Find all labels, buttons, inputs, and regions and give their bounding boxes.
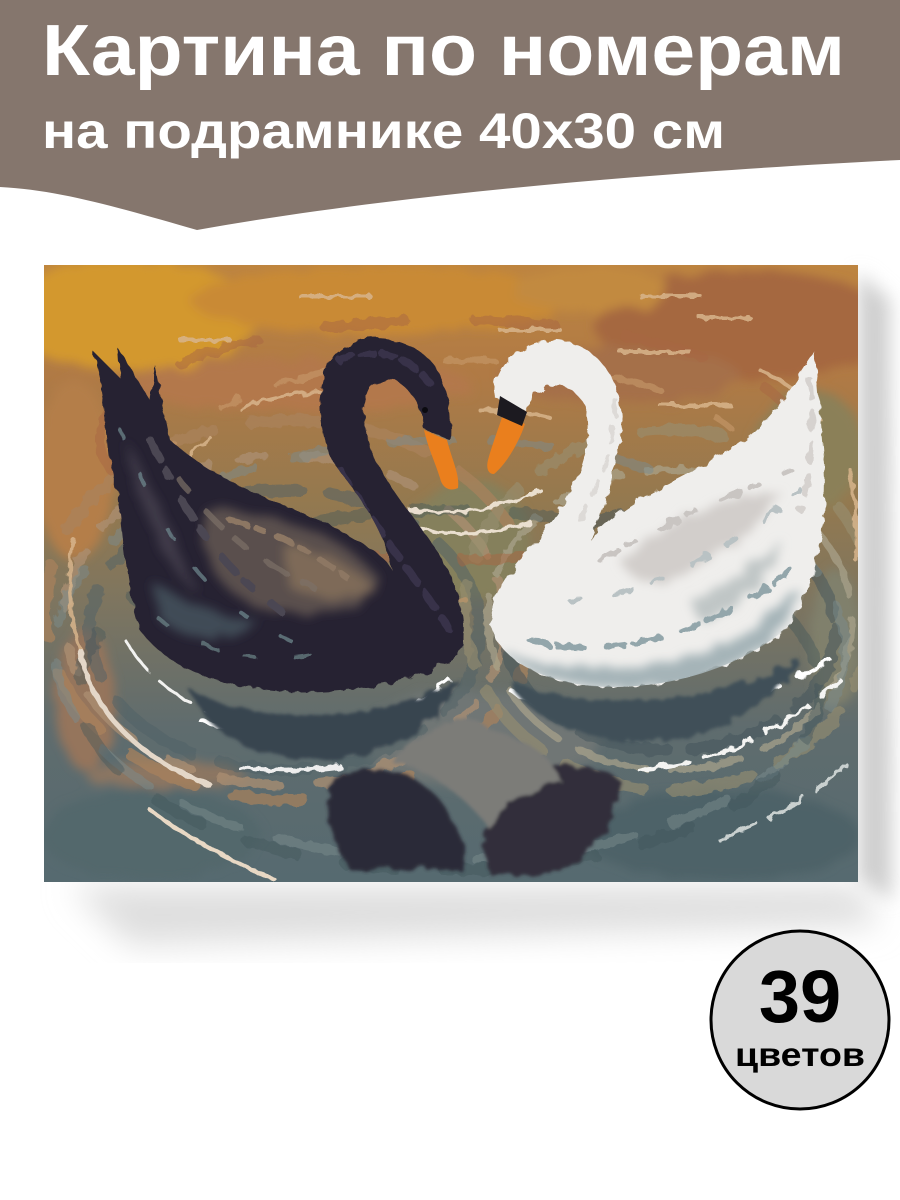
golden and brown water patches xyxy=(44,265,858,876)
canvas drop shadow xyxy=(70,272,892,945)
badge label: цветов xyxy=(735,1036,865,1073)
black swan xyxy=(92,339,463,692)
water background xyxy=(44,265,858,882)
black swan feather texture xyxy=(120,353,450,658)
subtitle: на подрамнике 40х30 см xyxy=(42,103,725,159)
black swan beak xyxy=(424,430,458,490)
badge: 39 colours xyxy=(711,931,889,1109)
white swan beak xyxy=(487,414,525,474)
painting: two swans on a pond xyxy=(0,260,895,882)
white swan xyxy=(487,340,825,689)
black swan body xyxy=(92,339,463,692)
light strokes on upper water xyxy=(69,296,857,650)
white swan body xyxy=(490,340,825,687)
title: Картина по номерам xyxy=(42,11,845,91)
white swan face mask xyxy=(497,396,527,426)
swan reflection xyxy=(190,660,800,875)
black swan eye xyxy=(422,407,428,413)
painted ripple rings xyxy=(45,320,875,870)
white highlights on the ripples xyxy=(80,490,850,880)
header banner xyxy=(0,0,900,230)
badge number: 39 xyxy=(759,955,841,1038)
white swan feather texture xyxy=(500,380,812,689)
